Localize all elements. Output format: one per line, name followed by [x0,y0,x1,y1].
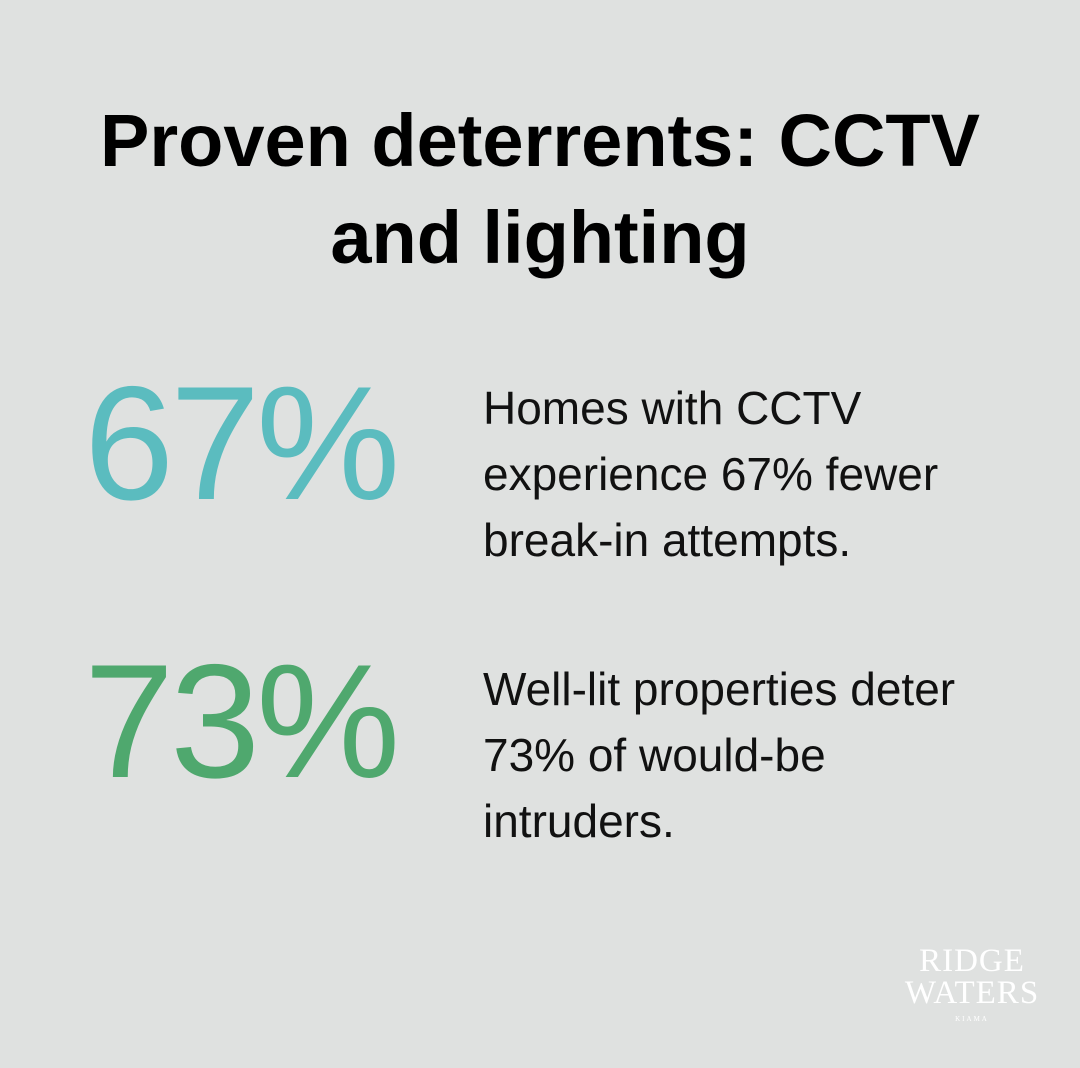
text: CCTV stat: Homes with CCTV [483,382,861,434]
logo: RIDGE [919,943,1025,979]
title: and lighting [330,196,750,279]
text: CCTV stat: break-in attempts. [483,514,851,566]
logo: KIAMA [955,1015,989,1023]
text: lighting stat: intruders. [483,795,675,847]
stat: 67%: 67% [84,353,396,534]
logo: WATERS [905,975,1039,1011]
text: CCTV stat [483,382,938,566]
title: Proven deterrents: CCTV [100,99,980,182]
stat: 73%: 73% [84,631,396,812]
text: lighting stat: 73% of would-be [483,729,826,781]
text: lighting stat [483,663,955,847]
logo [905,943,1039,1023]
title [100,99,980,279]
text: CCTV stat: experience 67% fewer [483,448,938,500]
text: lighting stat: Well-lit properties deter [483,663,955,715]
